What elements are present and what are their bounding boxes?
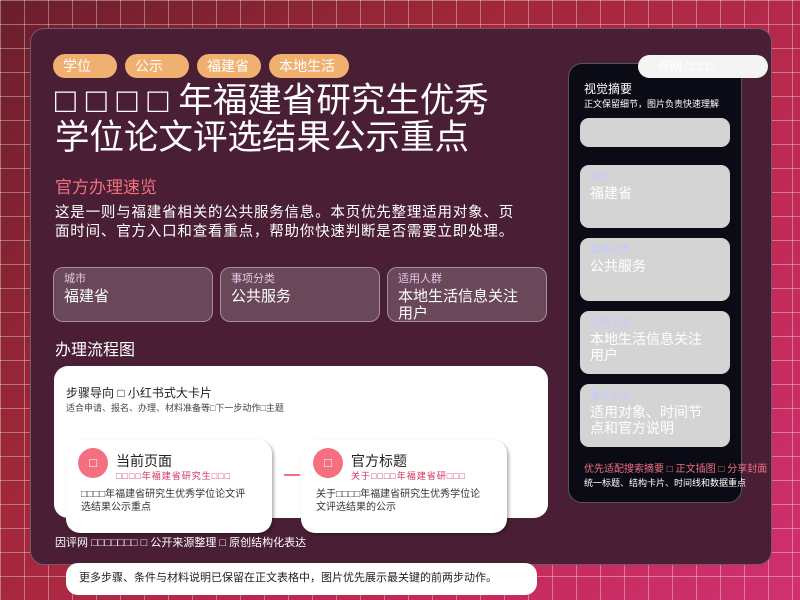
top right pill: 评网 □□□□	[658, 59, 714, 73]
step 1: □	[89, 455, 97, 470]
info cards: 事项分类	[231, 273, 275, 285]
title	[55, 82, 489, 157]
right panel	[568, 63, 742, 503]
text: 事项分类	[590, 245, 630, 256]
tags: 学位	[63, 58, 91, 74]
text: 福建省	[590, 185, 632, 201]
title: □□□□年福建省研究生优秀	[55, 82, 489, 120]
info cards: 公共服务	[231, 288, 291, 305]
info cards: 城市	[64, 273, 86, 285]
flow heading: 办理流程图	[55, 342, 135, 359]
tags: 福建省	[207, 58, 249, 74]
info cards	[53, 267, 547, 322]
info cards: 福建省	[64, 288, 109, 305]
right cards	[580, 118, 730, 147]
flow panel: 适合申请、报名、办理、材料准备等□下一步动作□主题	[66, 403, 284, 413]
step 1	[66, 440, 272, 533]
text: 本地生活信息关注用户	[590, 331, 702, 363]
right panel: 视觉摘要	[584, 82, 632, 96]
info cards: 本地生活信息关注用户	[398, 288, 518, 322]
text: 重点关注	[590, 391, 630, 402]
right panel: 正文保留细节，图片负责快速理解	[584, 99, 719, 109]
arrow	[284, 474, 300, 476]
text: 城市	[590, 172, 610, 183]
text: 公共服务	[590, 258, 646, 274]
step 2: 关于□□□□年福建省研□□□	[351, 471, 466, 481]
flow panel	[54, 366, 548, 518]
source line: 因评网 □□□□□□□ □ 公开来源整理 □ 原创结构化表达	[55, 537, 306, 549]
description: 面时间、官方入口和查看重点，帮助你快速判断是否需要立即处理。	[55, 224, 514, 240]
step 1: 当前页面	[116, 453, 172, 469]
bottom note	[66, 563, 537, 595]
text: 适用对象、时间节点和官方说明	[590, 404, 702, 436]
subtitle: 官方办理速览	[55, 178, 157, 197]
description	[55, 204, 514, 240]
flow panel: 步骤导向 □ 小红书式大卡片	[66, 386, 212, 400]
step 2: □	[324, 455, 332, 470]
text: 适用人群	[590, 318, 630, 329]
step 2: 关于□□□□年福建省研究生优秀学位论文评选结果的公示	[316, 489, 480, 513]
right panel: 统一标题、结构卡片、时间线和数据重点	[584, 478, 746, 488]
bottom note: 更多步骤、条件与材料说明已保留在正文表格中，图片优先展示最关键的前两步动作。	[79, 572, 497, 584]
title: 学位论文评选结果公示重点	[55, 119, 469, 157]
tags	[53, 54, 349, 78]
step 1: □□□□年福建省研究生□□□	[116, 471, 231, 481]
tags: 本地生活	[279, 58, 335, 74]
step 1: □□□□年福建省研究生优秀学位论文评选结果公示重点	[81, 489, 245, 513]
step 2	[301, 440, 507, 533]
right panel: 优先适配搜索摘要 □ 正文插图 □ 分享封面	[584, 464, 767, 475]
top right pill	[638, 55, 768, 78]
step 2: 官方标题	[351, 453, 407, 469]
tags: 公示	[135, 58, 163, 74]
description: 这是一则与福建省相关的公共服务信息。本页优先整理适用对象、页	[55, 205, 514, 221]
info cards: 适用人群	[398, 273, 442, 285]
